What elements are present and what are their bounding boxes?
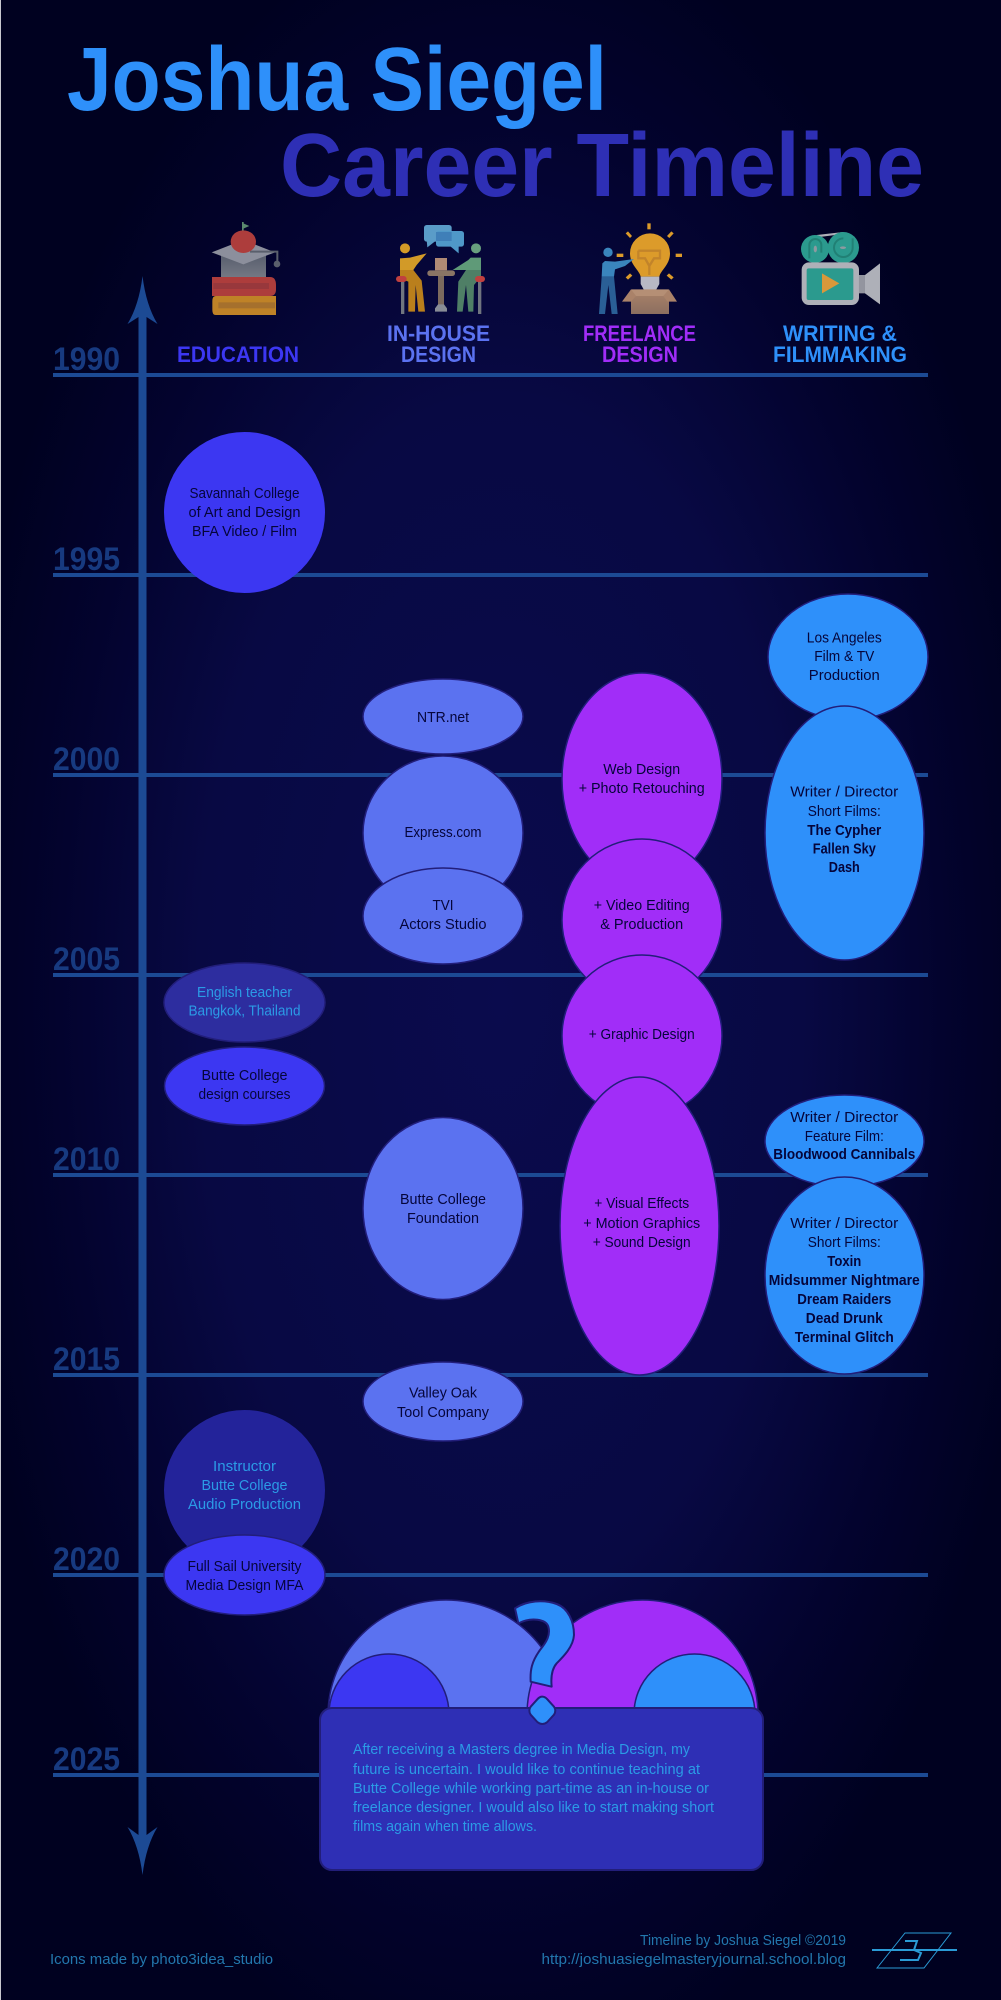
bubble: Writer Director feature film: Bloodwood Cannibals bbox=[773, 1146, 915, 1163]
year labels: 2025 bbox=[53, 1741, 120, 1777]
bubble: Butte College design courses bbox=[164, 1047, 324, 1125]
bubble: Savannah College: Savannah College bbox=[190, 485, 300, 502]
bubble: Full Sail University: Full Sail University bbox=[188, 1558, 302, 1575]
bubble: Butte College Foundation bbox=[363, 1118, 523, 1300]
bubble: NTR.net bbox=[363, 679, 523, 754]
bubble: Los Angeles: Film & TV bbox=[814, 648, 874, 665]
bubble: Writer Director short films 2010s: Toxin bbox=[827, 1253, 861, 1270]
bubble: Instructor: Butte College bbox=[202, 1477, 288, 1494]
bubble: TVI Actors Studio: TVI bbox=[432, 897, 454, 914]
bubble: Savannah College: BFA Video / Film bbox=[192, 523, 297, 540]
year labels: 2000 bbox=[53, 741, 120, 777]
footer: icon credit: Icons made by photo3idea_studio bbox=[50, 1952, 273, 1968]
bubble: English teacher bbox=[164, 963, 325, 1042]
bubble: Web Design bbox=[562, 673, 722, 885]
icon: in-house design bbox=[396, 225, 485, 314]
bubble: Butte College design courses: design courses bbox=[198, 1086, 290, 1103]
bubble: Writer Director feature film bbox=[765, 1095, 924, 1187]
bubble: Valley Oak Tool Company: Valley Oak bbox=[409, 1384, 477, 1402]
icon: education bbox=[212, 222, 280, 315]
title: Career Timeline: Career Timeline bbox=[280, 116, 924, 216]
bubble: Savannah College bbox=[164, 432, 325, 593]
year labels: 1995 bbox=[53, 541, 120, 577]
bubble: Video Editing: + Video Editing bbox=[594, 897, 690, 914]
arrow: vertical time axis bbox=[128, 276, 158, 1875]
bubble: Web Design: Web Design bbox=[603, 761, 680, 778]
heading: freelance design: FREELANCE bbox=[583, 321, 696, 346]
bubble: Graphic Design bbox=[562, 955, 722, 1117]
bubble: Valley Oak Tool Company bbox=[363, 1362, 523, 1441]
bubble: Writer Director short films 2010s: Dead Drunk bbox=[806, 1310, 883, 1327]
bubble: Express.com bbox=[363, 756, 523, 910]
heading: freelance design bbox=[583, 321, 696, 367]
bubble: Writer Director short films 2000s: Writer / Director bbox=[790, 784, 898, 800]
future domes behind callout bbox=[328, 1600, 758, 1830]
icon: question mark bbox=[515, 1601, 574, 1724]
icon: freelance design bbox=[599, 223, 682, 314]
callout: future plans bbox=[320, 1708, 763, 1870]
bubble: Visual Effects: + Sound Design bbox=[593, 1234, 691, 1251]
bubble: Visual Effects bbox=[560, 1077, 719, 1375]
icon: writing and filmmaking camera bbox=[801, 232, 880, 305]
bubble: Writer Director short films 2000s: Dash bbox=[829, 859, 860, 876]
heading: in-house design: DESIGN bbox=[401, 342, 476, 367]
bubble: Writer Director short films 2010s bbox=[765, 1177, 924, 1374]
callout: future plans: future is uncertain. I would like to continue teaching at bbox=[353, 1761, 701, 1778]
footer: timeline credit: Timeline by Joshua Siegel ©2019 bbox=[640, 1933, 846, 1949]
bubble: Writer Director short films 2000s bbox=[765, 706, 924, 960]
bubble: Writer Director short films 2010s: Terminal Glitch bbox=[795, 1329, 894, 1346]
bubble: Instructor bbox=[164, 1410, 325, 1570]
bubble: TVI Actors Studio: Actors Studio bbox=[400, 916, 486, 933]
bubble: Writer Director feature film: Feature Film: bbox=[805, 1128, 884, 1145]
bubble: Writer Director short films 2000s: The Cypher bbox=[807, 822, 881, 839]
heading: writing and filmmaking bbox=[773, 321, 907, 367]
bubble: TVI Actors Studio bbox=[363, 868, 523, 964]
heading: in-house design: IN-HOUSE bbox=[387, 321, 490, 346]
footer: timeline credit bbox=[542, 1933, 846, 1968]
bubble: Los Angeles bbox=[768, 594, 928, 720]
year labels bbox=[53, 341, 120, 1777]
bubble: Valley Oak Tool Company: Tool Company bbox=[397, 1404, 489, 1421]
bubble: Writer Director short films 2010s: Dream Raiders bbox=[797, 1291, 891, 1308]
heading: writing and filmmaking: WRITING & bbox=[783, 321, 897, 346]
bubble: Butte College Foundation: Foundation bbox=[407, 1210, 479, 1227]
bubble: Writer Director short films 2000s: Short Films: bbox=[808, 803, 881, 820]
bubble: Visual Effects: + Motion Graphics bbox=[583, 1215, 700, 1232]
bubble: Savannah College: of Art and Design bbox=[188, 504, 300, 521]
year labels: 2005 bbox=[53, 941, 120, 977]
bubble: Writer Director short films 2000s: Fallen Sky bbox=[813, 840, 876, 858]
heading: education: EDUCATION bbox=[177, 342, 299, 367]
title: Joshua Siegel: Joshua Siegel bbox=[67, 30, 607, 130]
year labels: 1990 bbox=[53, 341, 120, 377]
bubble: Video Editing bbox=[562, 839, 722, 1001]
bubble: Butte College Foundation: Butte College bbox=[400, 1191, 486, 1208]
heading: in-house design bbox=[387, 321, 490, 367]
year labels: 2015 bbox=[53, 1341, 120, 1377]
bubble: Instructor: Audio Production bbox=[188, 1496, 301, 1513]
bubble: Writer Director short films 2010s: Midsummer Nightmare bbox=[769, 1272, 920, 1289]
callout: future plans: Butte College while working part-time as an in-house or bbox=[353, 1780, 709, 1797]
icon: JS logo bbox=[872, 1933, 957, 1968]
bubble: Instructor: Instructor bbox=[213, 1458, 276, 1475]
bubble: Visual Effects: + Visual Effects bbox=[594, 1195, 689, 1212]
footer: timeline credit: http://joshuasiegelmasteryjournal.school.blog bbox=[542, 1952, 846, 1968]
bubble: Butte College design courses: Butte College bbox=[202, 1067, 288, 1084]
bubble: Web Design: + Photo Retouching bbox=[579, 780, 705, 797]
bubble: Full Sail University: Media Design MFA bbox=[186, 1577, 304, 1594]
heading: freelance design: DESIGN bbox=[602, 342, 678, 367]
year labels: 2020 bbox=[53, 1541, 120, 1577]
year labels: 2010 bbox=[53, 1141, 120, 1177]
callout: future plans: films again when time allows. bbox=[353, 1818, 537, 1835]
bubble: NTR.net: NTR.net bbox=[417, 709, 470, 726]
bubble: English teacher: Bangkok, Thailand bbox=[188, 1002, 300, 1020]
bubble: Video Editing: & Production bbox=[600, 916, 683, 933]
bubble: Writer Director short films 2010s: Writer / Director bbox=[790, 1215, 898, 1232]
bubble: Writer Director short films 2010s: Short Films: bbox=[808, 1234, 881, 1251]
bubble: Los Angeles: Los Angeles bbox=[807, 630, 882, 646]
callout: future plans: After receiving a Masters degree in Media Design, my bbox=[353, 1741, 690, 1758]
bubble: Writer Director feature film: Writer / Director bbox=[790, 1109, 898, 1126]
bubble: Express.com: Express.com bbox=[404, 824, 482, 841]
callout: future plans: freelance designer. I would also like to start making short bbox=[353, 1799, 715, 1816]
bubble: Los Angeles: Production bbox=[809, 667, 880, 684]
bubble: English teacher: English teacher bbox=[197, 984, 292, 1001]
bubble: Graphic Design: + Graphic Design bbox=[589, 1026, 695, 1043]
bubble: Full Sail University bbox=[164, 1535, 325, 1615]
heading: writing and filmmaking: FILMMAKING bbox=[773, 342, 907, 367]
